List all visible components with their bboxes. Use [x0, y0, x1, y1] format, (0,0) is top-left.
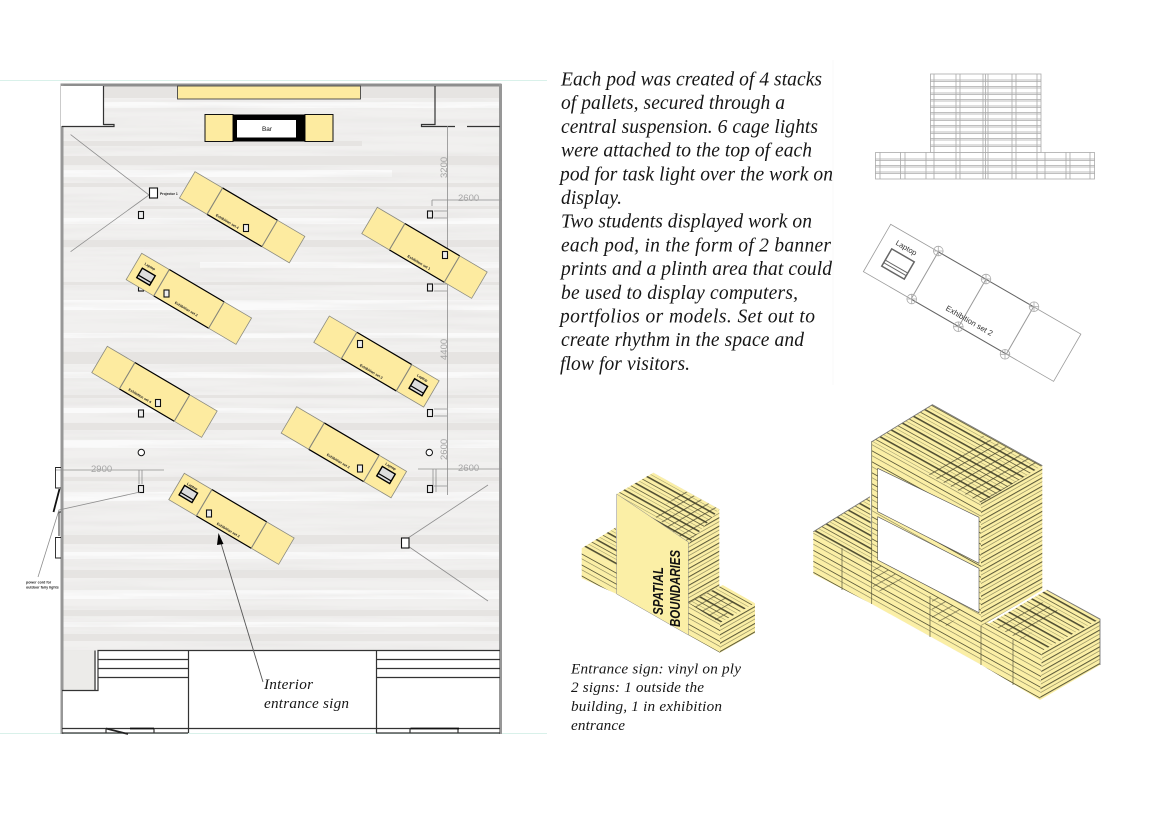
- dimension lines: 2900: [91, 464, 112, 475]
- cage lights: [907, 246, 1039, 359]
- pod: exhibition set 4 top: Exhibition set 4: [215, 213, 239, 230]
- label: interior entrance sign: entrance sign: [264, 695, 349, 712]
- sign wording: BOUNDARIES: [668, 550, 684, 627]
- left base stack: [582, 548, 617, 594]
- pod: exhibition set 1: Exhibition set 1: [407, 254, 431, 271]
- description paragraph: central suspension. 6 cage lights: [561, 117, 818, 138]
- right side of tower: [981, 466, 1042, 626]
- plan view of pod: exhibition set 2: [863, 224, 1081, 381]
- arrow: interior entrance sign: [217, 533, 263, 682]
- description paragraph: display.: [561, 188, 622, 209]
- front lower stacks: [813, 532, 990, 670]
- pod: exhibition set 3 bottom: Laptop: [186, 482, 198, 491]
- pod: exhibition set 3 middle right: [314, 316, 439, 407]
- right base stack: [688, 585, 755, 623]
- projector 1: Projector 1: [160, 192, 178, 196]
- projector 2: [402, 485, 488, 601]
- sign wording: [651, 550, 684, 627]
- pod: exhibition set 4 lower left: Exhibition set 4: [128, 388, 152, 404]
- walls: [60, 84, 502, 734]
- plan view of pod: exhibition set 2: Laptop: [894, 238, 918, 257]
- dimension lines: [55, 126, 502, 495]
- wood floor: [62, 85, 500, 691]
- sign wording: SPATIAL: [651, 567, 667, 615]
- pod: exhibition set 3 lower: [281, 407, 407, 498]
- description paragraph: pod for task light over the work on: [558, 164, 833, 185]
- description paragraph: be used to display computers,: [561, 283, 798, 304]
- side door and power cord: power cord for: [26, 580, 52, 584]
- left base stack top: [813, 497, 872, 564]
- projector 1: [71, 135, 178, 252]
- pallet block lines: [842, 441, 1013, 685]
- entrance sign caption: entrance: [571, 717, 625, 734]
- outline: [813, 405, 1100, 665]
- plan view of pod: exhibition set 2: Exhibition set 2: [944, 304, 994, 338]
- dimension lines: 4400: [439, 339, 450, 360]
- dimension lines: 2600: [439, 439, 450, 460]
- bottom stage and stairs: [62, 650, 500, 734]
- pod: exhibition set 2: [126, 253, 252, 344]
- laptop icon: [882, 249, 914, 279]
- description paragraph: of pallets, secured through a: [561, 93, 785, 114]
- description paragraph: portfolios or models. Set out to: [558, 306, 815, 328]
- entrance sign caption: building, 1 in exhibition: [571, 698, 722, 715]
- top face: [872, 405, 1042, 503]
- pod: exhibition set 3 middle right: Exhibition set 3: [359, 363, 383, 380]
- pod: exhibition set 3 bottom: [169, 473, 294, 564]
- description paragraph: Two students displayed work on: [561, 212, 812, 233]
- dimension lines: 3200: [439, 157, 450, 178]
- pod: exhibition set 4 top: [179, 172, 305, 263]
- label: interior entrance sign: Interior: [263, 676, 313, 693]
- dimension lines: 2600: [458, 463, 479, 474]
- banner upper: [878, 468, 979, 563]
- side door and power cord: outdoor fairy lights: [26, 586, 59, 590]
- description paragraph: prints and a plinth area that could: [559, 259, 832, 280]
- vinyl sign front: [617, 494, 688, 635]
- description paragraph: were attached to the top of each: [561, 141, 812, 162]
- label: interior entrance sign: [263, 676, 349, 712]
- side door and power cord: [26, 468, 140, 590]
- tower front: [872, 442, 981, 626]
- banner lower: [878, 517, 979, 613]
- pod: exhibition set 3 middle right: Laptop: [416, 373, 428, 383]
- pod: exhibition set 1: [362, 207, 487, 298]
- description paragraph: flow for visitors.: [560, 354, 690, 375]
- description paragraph: each pod, in the form of 2 banner: [561, 235, 831, 256]
- description paragraph: [558, 70, 833, 375]
- entrance sign caption: Entrance sign: vinyl on ply: [570, 660, 741, 678]
- bar counter: Bar: [262, 126, 273, 133]
- top yellow bar: [178, 86, 360, 99]
- dimension lines: 2600: [458, 193, 479, 204]
- pod: exhibition set 2: Laptop: [144, 262, 156, 271]
- description paragraph: Each pod was created of 4 stacks: [560, 70, 822, 90]
- entrance sign isometric: [582, 473, 755, 653]
- pallet pod isometric: [813, 405, 1100, 700]
- pod: exhibition set 4 lower left: [92, 346, 217, 437]
- top face of tower: [617, 473, 719, 544]
- pod: exhibition set 3 bottom: Exhibition set 3: [216, 522, 240, 538]
- description paragraph: create rhythm in the space and: [561, 330, 804, 351]
- pod: exhibition set 2: Exhibition set 2: [174, 301, 198, 317]
- floor plan: [26, 84, 502, 734]
- entrance sign caption: [570, 660, 741, 734]
- bar counter: [205, 114, 333, 142]
- entrance sign caption: 2 signs: 1 outside the: [571, 679, 704, 696]
- right side of tower: [688, 509, 719, 620]
- pod: exhibition set 3 lower: Laptop: [384, 462, 397, 471]
- right base stack: [987, 590, 1100, 651]
- small plinths and columns: [138, 211, 432, 492]
- pod: exhibition set 3 lower: Exhibition set 3: [326, 453, 350, 469]
- front crosshatch: [873, 562, 905, 592]
- front elevation of pod: [875, 74, 1095, 179]
